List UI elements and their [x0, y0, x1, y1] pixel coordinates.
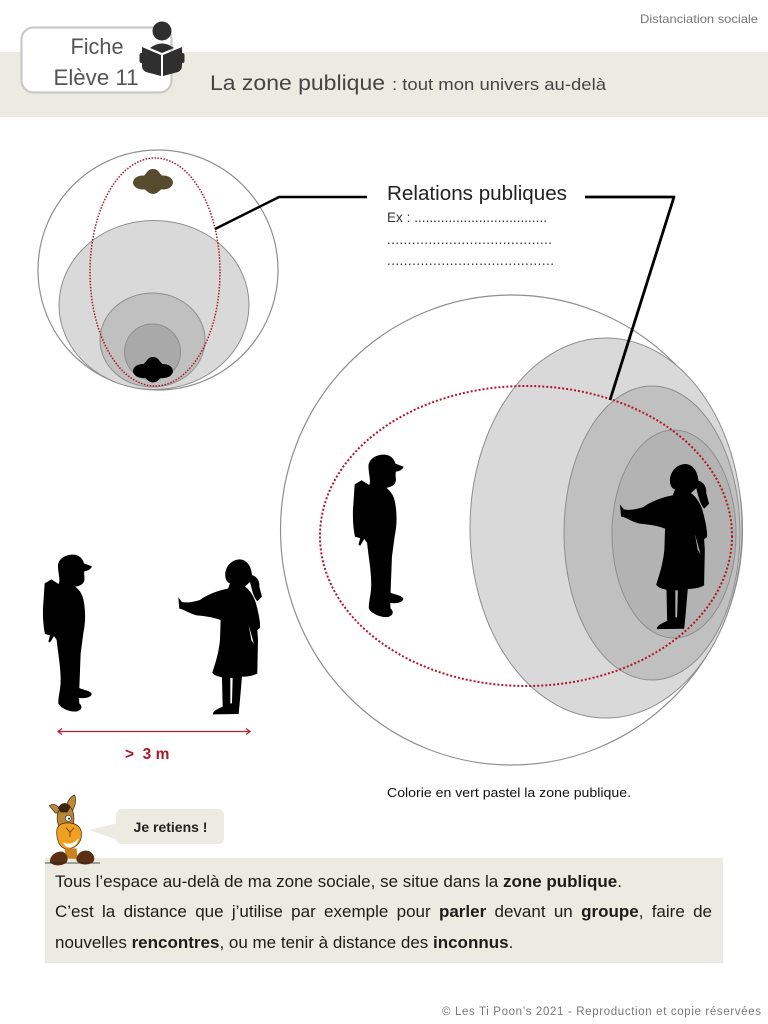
panel: Je retiens — [45, 858, 723, 963]
public zone outline — [90, 158, 220, 386]
text: line 1: Tous l’espace au-delà de ma zone sociale, se situe dans la zone publique. — [55, 872, 622, 891]
icon: donkey mascot — [45, 795, 100, 865]
footer: © Les Ti Poon’s 2021 - Reproduction et copie réservées — [442, 1006, 761, 1018]
arrow: distance — [58, 728, 250, 734]
silhouette: boy, left — [43, 555, 92, 712]
zone: personal — [100, 293, 205, 387]
text: line 3: nouvelles rencontres, ou me tenir à distance des inconnus. — [55, 933, 513, 952]
subtitle: : tout mon univers au-delà — [392, 76, 607, 94]
zone: social — [470, 338, 742, 718]
label: Relations publiques — [387, 183, 567, 268]
small diagram: top view of zones — [38, 150, 278, 390]
silhouette: girl — [620, 464, 709, 629]
speech bubble — [89, 809, 224, 844]
icon: brown figure from above — [133, 169, 173, 194]
title: La zone publique — [210, 71, 385, 95]
zone: social — [59, 220, 249, 390]
icon: reader with book — [140, 22, 184, 76]
silhouette: girl, left — [178, 559, 262, 714]
instruction: Colorie en vert pastel la zone publique. — [387, 786, 631, 800]
badge: Fiche Elève 11 — [22, 28, 172, 92]
zone: intimate — [124, 324, 180, 380]
icon: black figure from above — [133, 357, 173, 382]
distance label: > 3 m — [125, 746, 169, 763]
zone: personal — [564, 386, 740, 680]
silhouette: boy — [353, 455, 404, 617]
label: Relations publiques: ........................................ — [387, 232, 552, 247]
public zone outline — [320, 386, 732, 686]
leader lines to label — [215, 197, 674, 400]
text: line 2: C’est la distance que j’utilise par exemple pour parler devant un groupe, faire de — [55, 902, 712, 921]
badge: Fiche Elève 11: Fiche — [70, 34, 124, 59]
speech bubble: Je retiens ! — [134, 819, 207, 835]
top right label: Distanciation sociale — [640, 12, 758, 26]
zone: intimate — [612, 430, 736, 638]
label: Relations publiques: Relations publiques — [387, 183, 567, 205]
badge: Fiche Elève 11: Elève 11 — [54, 65, 138, 90]
label: Relations publiques: Ex : ................................... — [387, 210, 547, 225]
big diagram: side view of zones — [280, 295, 742, 765]
label: Relations publiques: ........................................ — [387, 253, 554, 268]
header band — [0, 52, 768, 117]
